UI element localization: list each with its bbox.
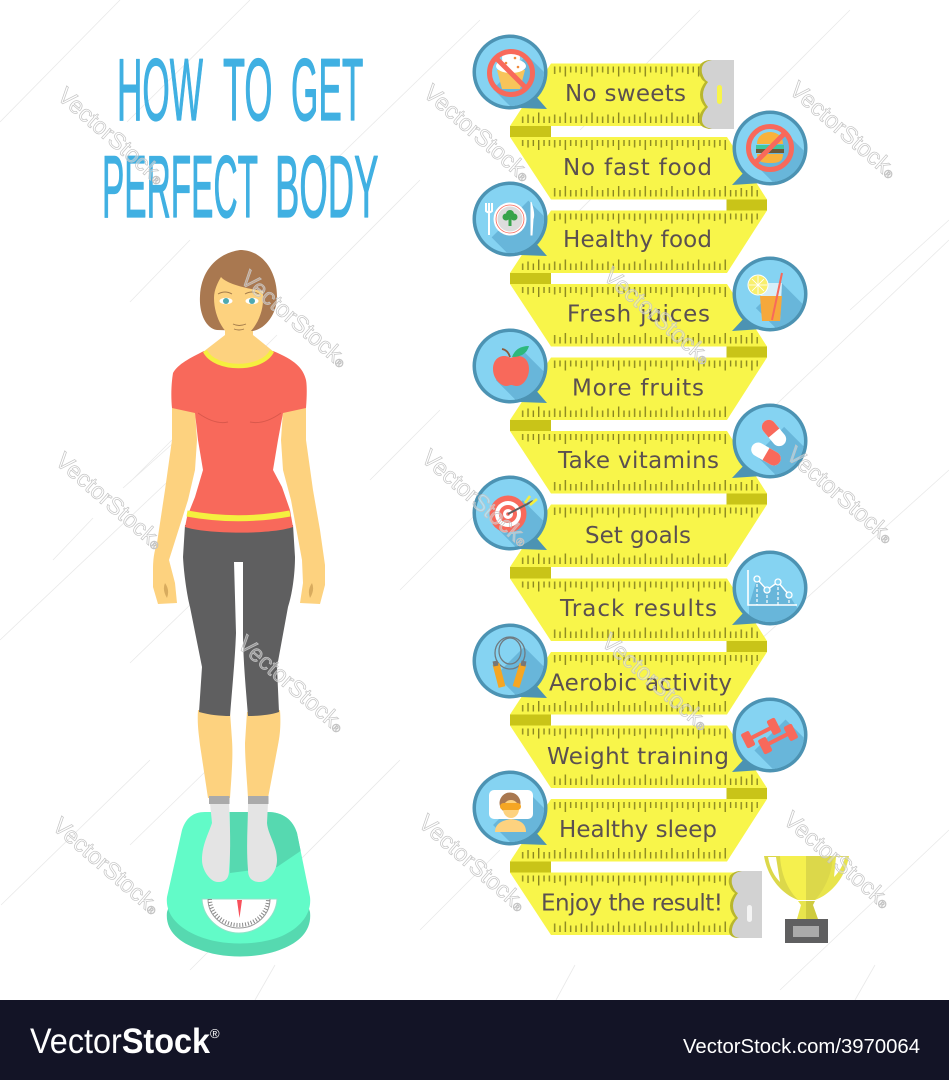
step: healthy food: Healthy food [563,227,712,253]
step: track results [510,578,767,641]
step: more fruits: More fruits [572,376,704,402]
icon: aerobic activity [472,624,548,698]
title: HOW [117,41,203,140]
step: enjoy the result [510,872,740,935]
icon: no fast food [732,110,808,186]
step: aerobic activity: Aerobic activity [549,671,732,697]
icon: take vitamins [732,404,808,478]
tape measure ribbon [510,60,767,938]
icon: no sweets [472,34,548,110]
title: TO [223,41,272,140]
watermarks: VectorStock® [53,82,171,189]
watermarks: VectorStock® [48,812,166,919]
step: fresh juices: Fresh juices [567,302,710,328]
step: track results: Track results [559,596,717,622]
footer bar: VectorStock.com/3970064 [683,1036,920,1058]
scales [167,805,310,956]
neck [203,325,274,376]
woman on scales [153,250,325,956]
step: aerobic activity [510,652,767,714]
tape hook top [699,60,734,129]
icon: set goals [472,476,548,550]
tape hook bottom [729,871,762,938]
shirt [171,351,307,533]
icon: healthy food [472,182,548,256]
step: take vitamins [510,431,767,494]
trophy [764,856,849,943]
title [102,41,378,237]
watermarks: VectorStock® [419,79,537,186]
icon: more fruits [472,328,548,404]
footer logo: VectorStock [30,1022,210,1061]
icon: fresh juices [732,256,808,332]
step: weight training [510,726,767,788]
arms [153,405,325,604]
legs [198,710,280,798]
watermarks: VectorStock® [599,262,717,369]
socks [202,796,277,882]
watermarks: VectorStock® [782,441,900,548]
step: fresh juices [510,284,767,346]
title: PERFECT [102,139,258,237]
watermarks: VectorStock® [233,630,351,737]
step: set goals [510,504,767,567]
watermarks [48,76,903,919]
footer bar: ® [210,1026,220,1041]
face [214,277,263,338]
watermarks: VectorStock® [785,76,903,183]
watermarks: VectorStock® [414,809,532,916]
pants [183,525,295,716]
hair [200,250,277,331]
footer bar [0,1000,949,1080]
step: healthy food [510,210,767,273]
step: no sweets [510,64,712,126]
step: no sweets: No sweets [565,81,686,107]
watermarks: VectorStock® [51,447,169,554]
step: more fruits [510,358,767,420]
icon: track results [732,550,810,628]
title: BODY [275,139,378,237]
watermarks: VectorStock® [597,628,715,735]
step: enjoy the result: Enjoy the result! [541,891,723,917]
watermarks: VectorStock® [417,444,535,551]
watermarks: VectorStock® [236,265,354,372]
icon: healthy sleep [472,770,548,846]
step: set goals: Set goals [585,523,691,549]
title: GET [291,41,363,140]
step: weight training: Weight training [547,744,729,770]
icon: weight training [732,698,808,772]
tape end strips [510,126,767,872]
step: no fast food [510,137,767,200]
step: no fast food: No fast food [563,155,712,181]
step: healthy sleep [510,799,767,862]
step: healthy sleep: Healthy sleep [559,817,717,843]
step: take vitamins: Take vitamins [557,448,719,474]
watermarks: VectorStock® [779,806,897,913]
